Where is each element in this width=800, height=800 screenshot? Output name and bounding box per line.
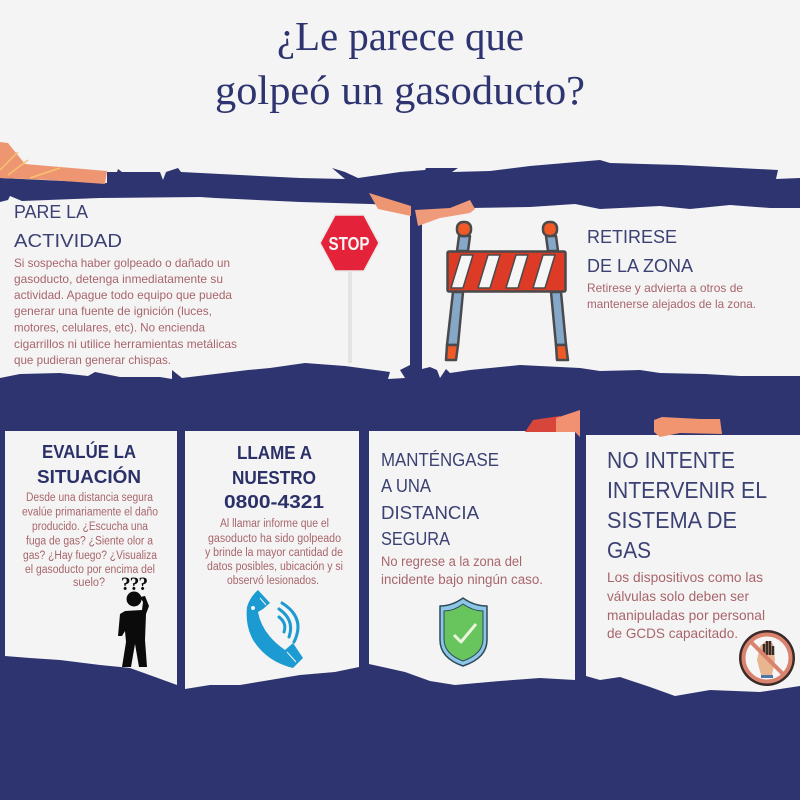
tape: card three xyxy=(525,410,580,437)
body text: cigarrillos ni utilice herramientas metálicas xyxy=(14,337,237,351)
heading xyxy=(587,226,694,276)
body text: Al llamar informe que el xyxy=(220,518,329,530)
body text: Desde una distancia segura xyxy=(26,492,154,504)
body text: observó lesionados. xyxy=(227,575,319,587)
heading: ACTIVIDAD xyxy=(14,230,122,251)
heading xyxy=(14,201,122,251)
icon: shield xyxy=(440,598,487,666)
heading xyxy=(381,449,499,549)
heading: SEGURA xyxy=(381,528,451,549)
body text: mantenerse alejados de la zona. xyxy=(587,297,756,311)
panel: retirese de la zona xyxy=(422,204,800,378)
body text: producido. ¿Escucha una xyxy=(32,521,149,533)
heading: MANTÉNGASE xyxy=(381,449,499,470)
icon: no touching hand xyxy=(739,630,795,686)
body text xyxy=(381,554,543,587)
body text xyxy=(205,518,343,587)
tape: panel corner xyxy=(369,193,411,216)
heading: SITUACIÓN xyxy=(37,466,141,487)
card: no intente intervenir xyxy=(586,435,800,696)
heading: NO INTENTE xyxy=(607,447,735,473)
title: ¿Le parece que xyxy=(277,13,524,59)
icon: confused person xyxy=(118,574,149,667)
body text: incidente bajo ningún caso. xyxy=(381,572,543,587)
heading: DISTANCIA xyxy=(381,502,480,523)
body text: válvulas solo deben ser xyxy=(607,588,749,604)
heading: LLAME A xyxy=(237,442,312,463)
body text: actividad. Apague todo equipo que pueda xyxy=(14,288,232,302)
body text: motores, celulares, etc). No encienda xyxy=(14,320,205,334)
heading: EVALÚE LA xyxy=(42,441,136,462)
heading: DE LA ZONA xyxy=(587,255,694,276)
body text xyxy=(607,569,765,641)
body text: generar una fuente de ignición (luces, xyxy=(14,304,212,318)
heading: INTERVENIR EL xyxy=(607,477,767,503)
body text: Si sospecha haber golpeado o dañado un xyxy=(14,256,230,270)
card: llame a nuestro xyxy=(185,431,359,689)
body text xyxy=(14,256,237,367)
icon: confused person: ??? xyxy=(121,574,148,595)
body text: datos posibles, ubicación y si xyxy=(207,561,343,573)
body text: el gasoducto por encima del xyxy=(25,564,155,576)
heading xyxy=(37,441,141,487)
tape: card four xyxy=(654,417,722,437)
tape: top left xyxy=(0,142,107,184)
body text: y brinde la mayor cantidad de xyxy=(205,547,343,559)
heading: A UNA xyxy=(381,475,432,496)
title: golpeó un gasoducto? xyxy=(215,67,585,113)
body text xyxy=(587,281,756,311)
heading: RETIRESE xyxy=(587,226,677,247)
heading: 0800-4321 xyxy=(224,491,324,512)
heading: PARE LA xyxy=(14,201,89,222)
icon: stop sign xyxy=(320,215,379,363)
icon: road barrier xyxy=(446,222,568,360)
tape: second panel corner xyxy=(415,200,475,226)
card: evalúe la situación xyxy=(5,431,177,685)
heading: SISTEMA DE xyxy=(607,507,737,533)
card: manténgase a una distancia segura xyxy=(369,431,575,685)
heading: GAS xyxy=(607,537,651,563)
icon: phone xyxy=(247,590,303,668)
body text: evalúe primariamente el daño xyxy=(22,506,158,518)
body text: gasoducto ha sido golpeado xyxy=(208,533,341,545)
body text: gasoducto, detenga inmediatamente su xyxy=(14,272,223,286)
icon: stop sign: STOP xyxy=(328,234,370,254)
body text: Retirese y advierta a otros de xyxy=(587,281,743,295)
body text: gas? ¿Hay fuego? ¿Visualiza xyxy=(23,550,158,562)
panel: pare la actividad xyxy=(0,196,410,379)
body text: que pudieran generar chispas. xyxy=(14,353,171,367)
title xyxy=(215,13,585,113)
heading xyxy=(224,442,324,512)
body text: manipuladas por personal xyxy=(607,607,765,623)
body text: fuga de gas? ¿Siente olor a xyxy=(26,536,154,548)
heading: NUESTRO xyxy=(232,467,316,488)
vertical divider xyxy=(410,205,422,370)
body text xyxy=(22,492,158,589)
body text: de GCDS capacitado. xyxy=(607,625,738,641)
body text: Los dispositivos como las xyxy=(607,569,763,585)
heading xyxy=(607,447,767,563)
body text: No regrese a la zona del xyxy=(381,554,522,569)
body text: suelo? xyxy=(73,577,105,589)
